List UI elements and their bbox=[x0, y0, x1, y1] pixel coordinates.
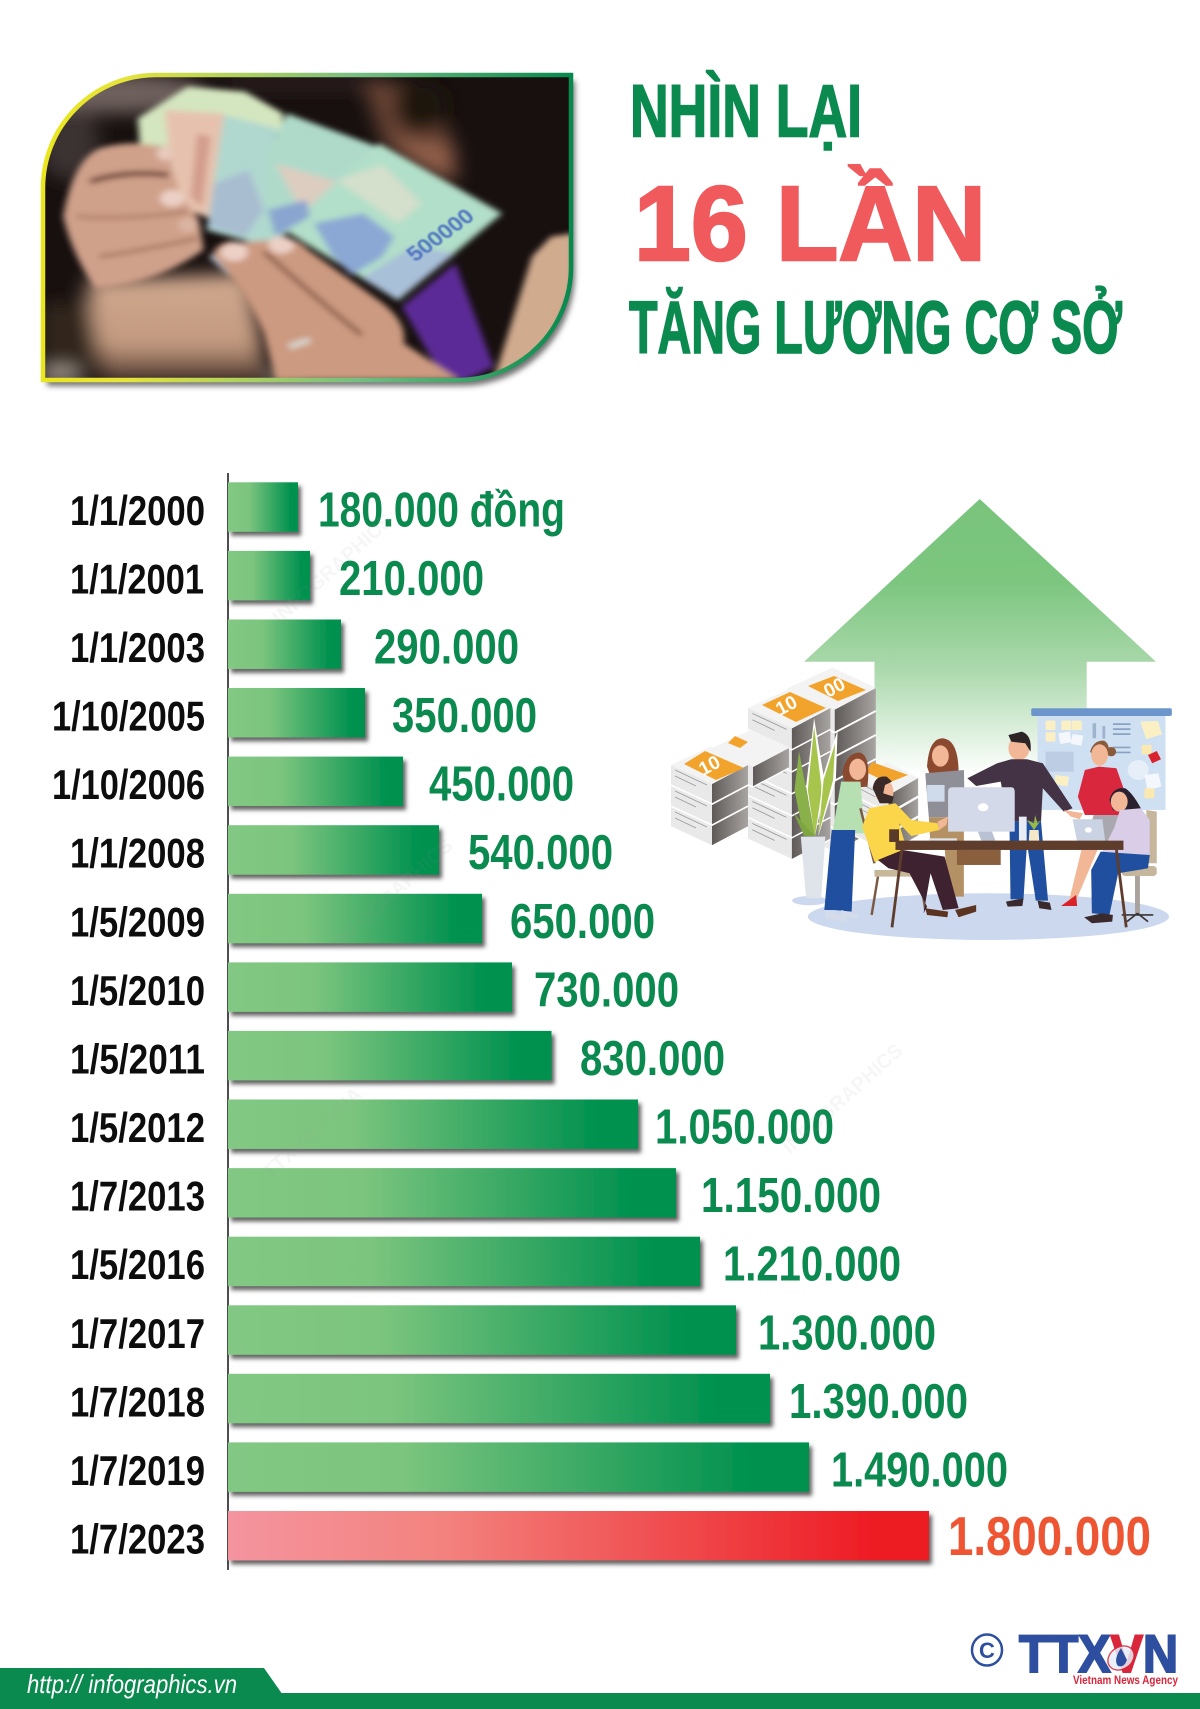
watermark text: INFOGRAPHICS bbox=[269, 510, 397, 629]
person: woman in grey bbox=[925, 738, 965, 897]
bar bbox=[228, 1237, 700, 1286]
floor bbox=[808, 893, 1169, 940]
date: 1/1/2001 bbox=[70, 555, 204, 602]
person: man in dark sweater bbox=[967, 732, 1083, 910]
value: 350.000 bbox=[392, 689, 537, 743]
row 1/1/2001 bbox=[70, 551, 484, 606]
chair: right bbox=[1122, 810, 1157, 922]
row 1/5/2010 bbox=[70, 962, 679, 1017]
date: 1/10/2006 bbox=[52, 761, 205, 808]
icon: money stacks: 10 bbox=[772, 692, 801, 720]
title line 2: 16 LẦN bbox=[634, 165, 986, 283]
title bbox=[629, 70, 1123, 369]
photo content bbox=[23, 73, 574, 383]
bar bbox=[228, 962, 512, 1012]
bar bbox=[228, 482, 298, 532]
copyright mark bbox=[972, 1634, 1002, 1666]
date: 1/7/2018 bbox=[70, 1378, 205, 1425]
date: 1/7/2023 bbox=[70, 1516, 205, 1562]
date: 1/1/2003 bbox=[70, 624, 205, 671]
value: 1.800.000 bbox=[948, 1505, 1151, 1567]
faint watermarks bbox=[259, 510, 907, 1184]
date: 1/1/2000 bbox=[70, 487, 205, 534]
row 1/5/2011 bbox=[70, 1031, 725, 1086]
row 1/7/2019 bbox=[70, 1442, 1008, 1497]
date: 1/5/2009 bbox=[70, 898, 205, 945]
date: 1/5/2010 bbox=[70, 967, 205, 1014]
planning board bbox=[1031, 708, 1172, 810]
date: 1/5/2016 bbox=[70, 1241, 205, 1288]
bar bbox=[228, 1168, 676, 1218]
date: 1/5/2011 bbox=[70, 1035, 205, 1082]
value: 650.000 bbox=[510, 895, 655, 949]
row 1/5/2016 bbox=[70, 1237, 901, 1292]
plant bbox=[792, 718, 838, 905]
row 1/7/2017 bbox=[70, 1305, 936, 1360]
row 1/5/2009 bbox=[70, 894, 655, 949]
value: 730.000 bbox=[534, 963, 679, 1017]
watermark text: INFOGRAPHICS bbox=[329, 835, 457, 954]
value: 180.000 đồng bbox=[318, 483, 565, 537]
value: 1.490.000 bbox=[831, 1443, 1008, 1497]
photo gradient border bbox=[43, 75, 571, 380]
bar bbox=[228, 1100, 638, 1149]
title line 1: NHÌN LẠI bbox=[630, 70, 862, 152]
bar bbox=[228, 894, 482, 943]
illustration: rising arrow, money stacks and office team bbox=[671, 499, 1172, 940]
agency name: Vietnam News Agency bbox=[1073, 1675, 1179, 1687]
value: 450.000 bbox=[429, 758, 574, 812]
bar bbox=[228, 757, 403, 806]
icon: money stacks: 10 bbox=[695, 752, 724, 780]
value: 540.000 bbox=[468, 826, 613, 880]
date: 1/7/2019 bbox=[70, 1447, 205, 1494]
agency letters: TTXVN bbox=[1019, 1625, 1178, 1684]
row 1/7/2023 highlighted bbox=[70, 1505, 1151, 1567]
row 1/1/2008 bbox=[70, 825, 613, 880]
date: 1/1/2008 bbox=[70, 830, 205, 877]
office team scene bbox=[792, 708, 1172, 940]
date: 1/7/2017 bbox=[70, 1310, 205, 1357]
person: seated woman bbox=[1084, 788, 1150, 923]
bar bbox=[228, 1442, 809, 1492]
row 1/10/2006 bbox=[52, 757, 574, 812]
footer band with website tab bbox=[0, 1668, 1200, 1709]
value: 1.150.000 bbox=[701, 1169, 881, 1223]
person: seated man in yellow bbox=[860, 776, 976, 917]
website url: http:// infographics.vn bbox=[27, 1669, 237, 1699]
bar bbox=[228, 825, 439, 875]
bar bbox=[228, 551, 310, 600]
watermark text: INFOGRAPHICS bbox=[779, 1040, 907, 1159]
table with computers bbox=[892, 787, 1126, 927]
date: 1/7/2013 bbox=[70, 1173, 205, 1220]
row 1/7/2018 bbox=[70, 1374, 968, 1429]
bar bbox=[228, 1511, 929, 1560]
bar bbox=[228, 1374, 770, 1423]
value: 830.000 bbox=[580, 1032, 725, 1086]
person: woman in green bbox=[824, 753, 868, 922]
person: woman in red bbox=[1061, 741, 1124, 906]
globe emblem bbox=[1103, 1641, 1139, 1675]
bar bbox=[228, 1305, 736, 1355]
row 1/10/2005 bbox=[52, 688, 537, 743]
row 1/1/2003 bbox=[70, 620, 519, 674]
value: 1.390.000 bbox=[789, 1375, 968, 1429]
value: 1.210.000 bbox=[723, 1238, 901, 1292]
value: 1.050.000 bbox=[655, 1100, 834, 1154]
row 1/7/2013 bbox=[70, 1168, 881, 1223]
row 1/5/2012 bbox=[70, 1100, 834, 1154]
chart axis bbox=[227, 473, 229, 1570]
icon: green up arrow bbox=[804, 499, 1156, 775]
icon: money stacks bbox=[671, 667, 918, 860]
date: 1/10/2005 bbox=[52, 692, 205, 740]
bar bbox=[228, 620, 341, 669]
header photo: hands holding banknotes bbox=[23, 73, 574, 383]
row 1/1/2000 bbox=[70, 482, 565, 537]
watermark text: TTXVN - VNA bbox=[259, 1083, 367, 1184]
TTXVN logo bbox=[972, 1625, 1179, 1687]
value: 210.000 bbox=[339, 552, 484, 606]
bar chart: base salary by date bbox=[52, 473, 1151, 1570]
footer tab shape bbox=[0, 1668, 1200, 1709]
bar bbox=[228, 688, 365, 737]
photo frame shadow bbox=[43, 75, 571, 380]
bar bbox=[228, 1031, 552, 1080]
value: 1.300.000 bbox=[758, 1306, 936, 1360]
value: 290.000 bbox=[374, 620, 519, 674]
banknote denomination: 500000 bbox=[402, 204, 479, 266]
date: 1/5/2012 bbox=[70, 1104, 205, 1151]
copyright mark: C bbox=[979, 1638, 995, 1663]
icon: money stacks: 00 bbox=[820, 674, 849, 702]
